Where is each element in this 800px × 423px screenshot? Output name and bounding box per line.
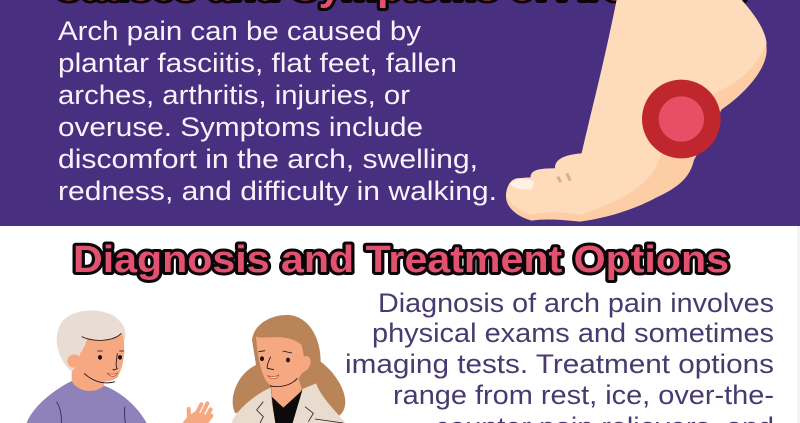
doctor neck — [272, 375, 302, 423]
illustration: raised hand — [183, 403, 212, 423]
doctor coat lines — [257, 402, 343, 423]
doctor features — [259, 351, 297, 387]
text block: causes and symptoms: overuse. Symptoms include — [58, 112, 423, 142]
foot light upper — [506, 0, 767, 215]
patient eyes — [98, 355, 122, 360]
text block: causes and symptoms: Arch pain can be caused by — [58, 16, 422, 46]
illustration: doctor — [232, 315, 345, 423]
text block: causes and symptoms: redness, and difficulty in walking. — [58, 176, 497, 206]
patient hair — [57, 310, 126, 372]
doctor mouth — [268, 375, 279, 379]
pain marker outer ring — [642, 80, 721, 158]
doctor coat right — [293, 383, 345, 423]
fingers — [189, 403, 211, 421]
doctor black top — [272, 390, 303, 423]
foot shaded sole — [506, 0, 767, 222]
text block: causes and symptoms: discomfort in the arch, swelling, — [58, 144, 478, 174]
text block: diagnosis and treatment: Diagnosis of arch pain involves — [378, 288, 774, 318]
icon: foot with heel pain marker — [506, 0, 767, 222]
text block: causes and symptoms — [58, 16, 497, 206]
patient mouth — [107, 373, 117, 376]
illustration: patient — [27, 310, 147, 423]
patient face — [79, 333, 124, 382]
doctor face — [256, 337, 311, 387]
patient shirt — [27, 381, 147, 423]
patient neck — [72, 362, 104, 391]
patient ear — [67, 354, 81, 368]
toe creases — [558, 173, 570, 182]
text block: diagnosis and treatment: physical exams and sometimes — [372, 318, 774, 348]
text block: diagnosis and treatment: range from rest, ice, over-the- — [393, 380, 774, 410]
doctor coat left — [232, 388, 275, 423]
toenail — [510, 179, 534, 190]
patient shirt folds — [57, 402, 125, 423]
patient features — [82, 333, 124, 383]
text block: diagnosis and treatment: imaging tests. Treatment options — [345, 349, 774, 379]
heading: diagnosis and treatment options: Diagnosis and Treatment Options — [73, 239, 729, 281]
palm — [183, 412, 212, 423]
doctor hair — [233, 315, 345, 416]
text block: causes and symptoms: plantar fasciitis, flat feet, fallen — [58, 48, 457, 78]
panel: causes and symptoms background — [0, 0, 800, 226]
pain marker inner circle — [659, 96, 704, 142]
right edge strip — [797, 226, 800, 423]
text block: causes and symptoms: arches, arthritis, injuries, or — [58, 80, 410, 110]
text block: diagnosis and treatment — [345, 288, 774, 423]
panel: diagnosis and treatment background — [0, 226, 800, 423]
doctor eyes — [260, 356, 290, 362]
